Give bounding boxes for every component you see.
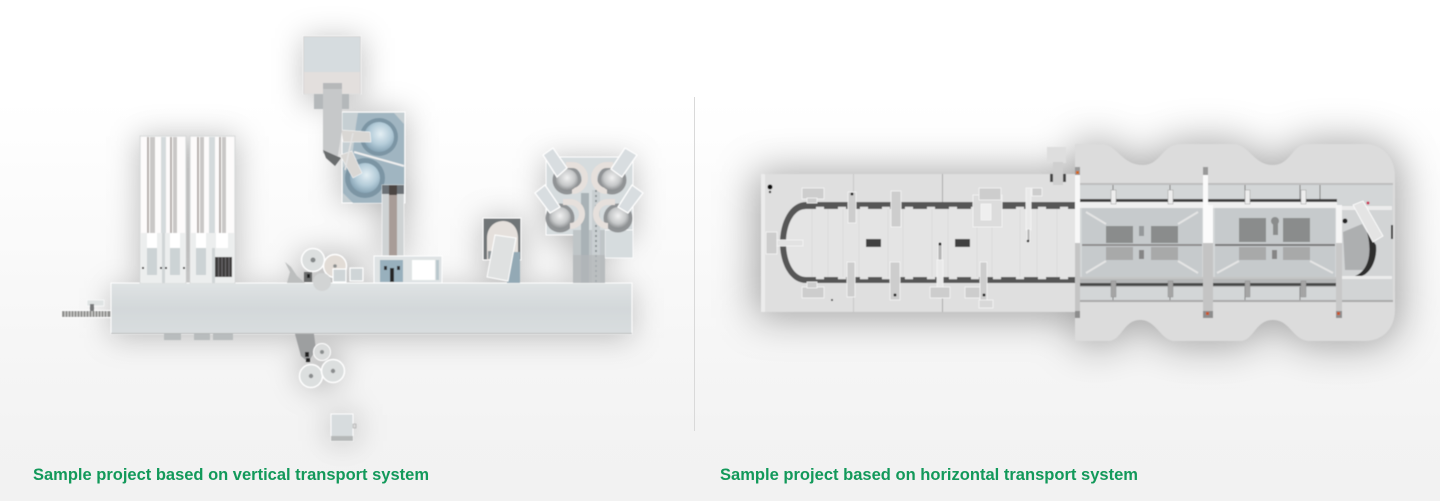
transport columns (573, 190, 605, 283)
post: three (1336, 205, 1342, 318)
plate: right section (1075, 144, 1395, 341)
conveyor: infeed (61, 300, 111, 318)
feeder: top hopper box (303, 36, 361, 109)
panel: vertical transport system machine (61, 36, 643, 441)
divider (694, 97, 695, 431)
magazine: right pair (190, 136, 235, 283)
transport column (382, 185, 404, 256)
unit: rotary assembly above bar (285, 248, 363, 291)
stations on loop (766, 188, 1042, 308)
unit: blue bowl feeders (340, 112, 405, 203)
chute (323, 83, 342, 166)
panel: left deck (1082, 208, 1202, 277)
box: outfeed (331, 414, 356, 441)
dots (768, 184, 772, 190)
panel: horizontal transport system machine (761, 144, 1395, 341)
post: two (1203, 167, 1213, 318)
unit: single bowl station (483, 218, 521, 283)
magazine: left pair (140, 136, 186, 283)
icon: bowl two (345, 158, 385, 198)
tabs under bar (164, 334, 233, 340)
post: one (1075, 167, 1080, 318)
icon: dark stack (215, 257, 232, 277)
clamps along rails (1111, 190, 1306, 297)
conveyor: top view loop (780, 202, 1076, 283)
plate: left section (761, 174, 1076, 312)
dark windows (866, 239, 970, 247)
panel: right deck (1215, 208, 1335, 277)
caption: vertical: Sample project based on vertical transport system (33, 465, 429, 484)
panel: base transport bar (111, 283, 632, 334)
unit: end turnaround (1342, 201, 1393, 300)
unit: four bowl feeder (535, 148, 643, 283)
caption: horizontal: Sample project based on horizontal transport system (720, 465, 1138, 484)
frame: inner track area (1080, 183, 1393, 302)
unit: transfer station (374, 256, 442, 283)
icon: bowl one (360, 118, 398, 156)
unit: rotary assembly below bar (295, 334, 344, 388)
small device (1047, 147, 1066, 185)
